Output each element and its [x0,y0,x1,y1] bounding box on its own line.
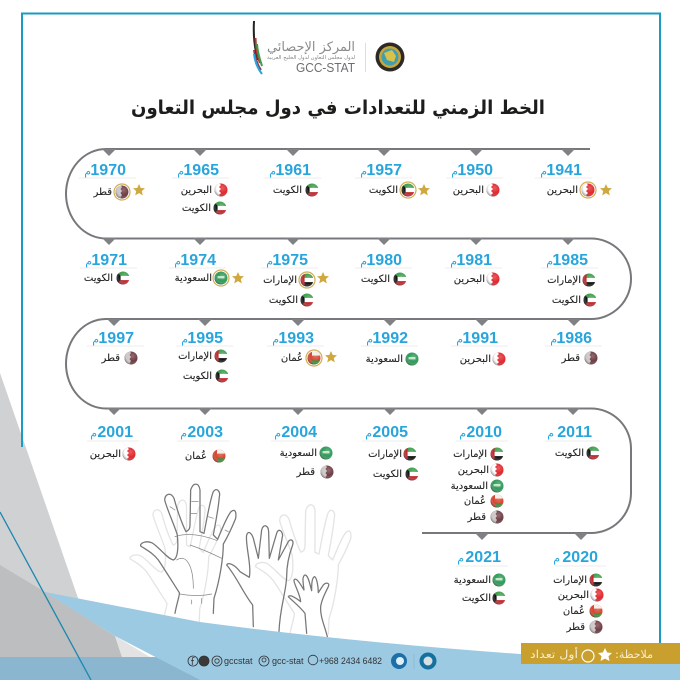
timeline markers [102,149,588,540]
entry 1985: 1985 [552,252,588,269]
entry 1992: السعودية [366,354,403,365]
entry 1986 [545,330,602,365]
entry 2020: الإمارات [553,575,587,586]
entry 1974: م [174,255,181,268]
phone number: +968 2434 6482 [319,656,382,666]
entry 2010: السعودية [451,481,488,492]
entry 1957: الكويت [369,185,398,196]
entry 2004: 2004 [281,424,317,441]
entry 1941 [535,162,612,198]
entry 1974: السعودية [175,273,212,284]
title: الخط الزمني للتعدادات في دول مجلس التعاون [131,97,545,119]
entry 2010: قطر [466,512,486,523]
footer: contact details [188,652,436,670]
entry 1965 [172,162,229,215]
entry 1980: 1980 [366,252,402,269]
entry 1981: البحرين [454,274,485,285]
entry 1980: الكويت [361,274,390,285]
entry 2005: 2005 [372,424,408,441]
entry 1980 [355,252,412,286]
footer band: dark blue [0,657,210,680]
timeline path [66,149,631,533]
entry 1997: 1997 [98,330,134,347]
entry 1991: م [456,333,463,346]
entry 2020: البحرين [558,590,589,601]
entry 2005: م [365,427,372,440]
entry 2021: الكويت [462,593,491,604]
entry 2011: 2011 [557,424,592,441]
entry 2020: عُمان [563,605,585,617]
icon: ring [582,650,594,662]
entry 1997: م [92,333,99,346]
entry 1995 [176,330,233,383]
entry 1975: 1975 [272,252,308,269]
entry 2004: السعودية [280,448,317,459]
logo ribbon [254,21,262,74]
entry 1971: م [85,255,92,268]
entry 1970: 1970 [90,162,126,179]
entry 1993: 1993 [278,330,314,347]
entry 1950: 1950 [457,162,493,179]
entry 1992: م [366,333,373,346]
entry 1992 [361,330,419,366]
entry 2004: م [274,427,281,440]
entry 1941: م [540,165,547,178]
emblem: GCC [376,42,404,72]
entry 1965: م [177,165,184,178]
entry 2020: م [553,552,560,565]
icon: star [598,648,612,661]
entry 1957 [355,162,430,198]
entry 1986: قطر [560,353,580,364]
logo arabic subtitle: لدول مجلس التعاون لدول الخليج العربية [267,55,355,61]
entry 2005: الكويت [373,469,402,480]
entry 1941: البحرين [547,185,578,196]
entry 2005: الإمارات [368,449,402,460]
entry 1981: 1981 [456,252,492,269]
diagonal blue line [0,512,91,680]
partner logo 2 [420,652,436,670]
entry 1950: م [451,165,458,178]
partner logo 1 [391,653,407,669]
illustration: raised hands [130,484,351,637]
entry 2003: م [180,427,187,440]
entry 1985: م [546,255,553,268]
entry 1985: الإمارات [547,275,581,286]
entry 1995: 1995 [187,330,223,347]
logo latin name: GCC-STAT [296,60,355,75]
entry 2020: قطر [565,622,585,633]
entry 1965: 1965 [183,162,219,179]
background: grey geometric shapes [0,373,150,657]
entry 2001: البحرين [90,449,121,460]
entry 2010: عُمان [464,495,486,507]
logo: GCC-STAT [254,21,404,75]
entry 1985: الكويت [552,295,581,306]
note label: ملاحظة: [615,648,653,661]
entry 1971 [80,252,137,285]
entry 2021: 2021 [465,549,501,566]
entry 1980: م [360,255,367,268]
entry 1950 [446,162,503,197]
entry 2010: م [459,427,466,440]
entry 1975: م [266,255,273,268]
entry 1971: الكويت [84,273,113,284]
entry 1941: 1941 [546,162,582,179]
entry 2021 [454,549,508,605]
entry 1974 [169,252,244,286]
entry 1993: عُمان [281,352,303,364]
entry 2011: م [547,427,554,440]
entry 1961 [264,162,321,197]
entry 2021: السعودية [454,575,491,586]
entry 2003: عُمان [185,450,207,462]
entry 1970 [79,162,145,200]
entry 2011 [545,424,600,460]
entry 2004 [271,424,334,479]
entry 2020: 2020 [562,549,598,566]
social handle: gccstat [224,656,253,666]
entry 2001: 2001 [97,424,133,441]
entry 1965: الكويت [182,203,211,214]
logo arabic name: المركز الإحصائي [267,40,355,55]
entry 1970: م [84,165,91,178]
entry 1993: م [272,333,279,346]
entry 1981: م [450,255,457,268]
entry 1970: قطر [92,187,112,198]
entry 2011: الكويت [555,448,584,459]
entry 2010 [451,424,508,524]
entry 1950: البحرين [453,185,484,196]
note bar: first census legend [521,643,680,664]
entry 2010: الإمارات [453,449,487,460]
entry 1981 [445,252,502,286]
entry 1961: 1961 [275,162,311,179]
entry 2005 [362,424,419,481]
entry 1965: البحرين [181,185,212,196]
entry 1975: الإمارات [263,275,297,286]
entry 1974: 1974 [180,252,216,269]
entry 1997 [87,330,144,365]
entry 1991 [451,330,508,366]
entry 1986: م [550,333,557,346]
entry 1961: م [269,165,276,178]
entry 2001: م [90,427,97,440]
entry 1985 [541,252,598,307]
entry 2021: م [457,552,464,565]
entry 1995: م [181,333,188,346]
note text: أول تعداد [530,647,578,661]
entry 2003 [177,424,229,463]
website handle: gcc-stat [272,656,304,666]
entry 2010: 2010 [466,424,502,441]
entry 1975: الكويت [269,295,298,306]
entry 2020 [553,549,606,634]
entry 2010: البحرين [458,465,489,476]
entry 1991: 1991 [462,330,498,347]
entry 1995: الإمارات [178,351,212,362]
entry 1961: الكويت [273,185,302,196]
entry 1957: م [360,165,367,178]
entry 2004: قطر [295,467,315,478]
entry 1993 [267,330,337,366]
entry 1957: 1957 [366,162,402,179]
entry 2001 [87,424,139,461]
entry 1991: البحرين [460,354,491,365]
entry 1997: قطر [100,353,120,364]
entry 1995: الكويت [183,371,212,382]
social icons [188,655,318,666]
entry 1992: 1992 [372,330,408,347]
entry 1975 [261,252,329,307]
entry 2003: 2003 [187,424,223,441]
footer: light blue swoosh [45,592,680,680]
entry 1986: 1986 [556,330,592,347]
entry 1971: 1971 [91,252,127,269]
